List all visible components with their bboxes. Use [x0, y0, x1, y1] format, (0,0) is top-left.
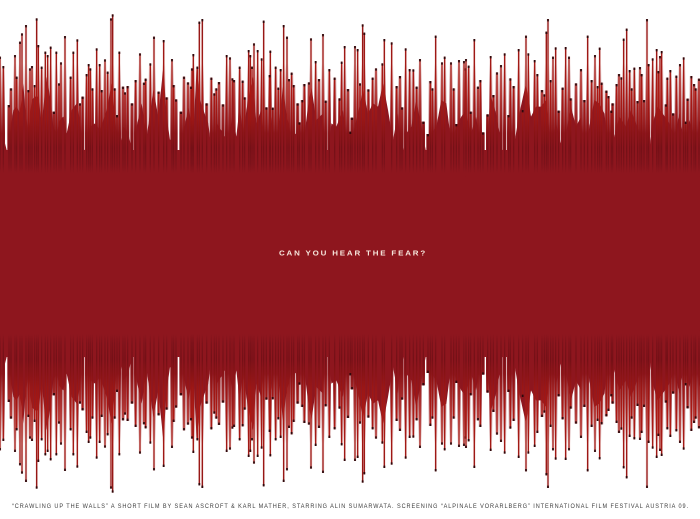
headline: can you hear the fear: CAN YOU HEAR THE FEAR? — [279, 250, 427, 258]
waveform: upper half of spikes — [0, 14, 700, 260]
waveform: lower half of spikes, mirrored — [0, 247, 700, 493]
